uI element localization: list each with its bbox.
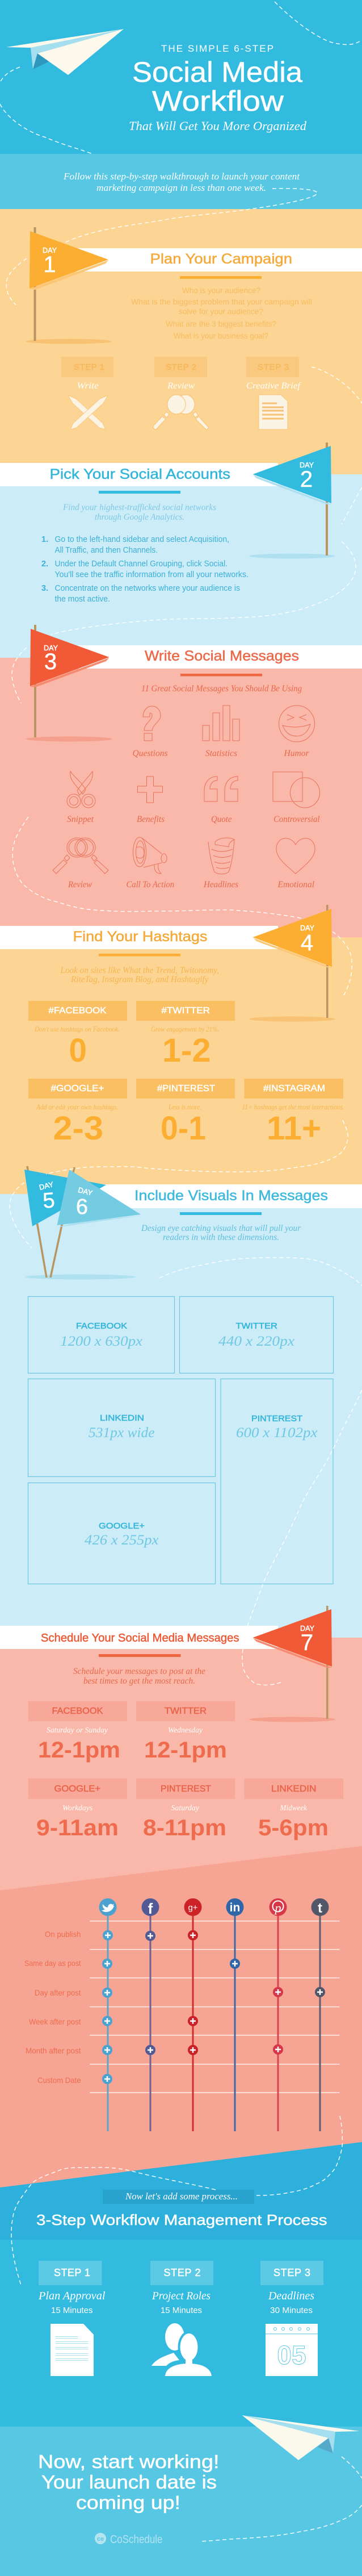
step 2 review: Review — [167, 381, 195, 391]
panel: workflow management process — [36, 2190, 327, 2376]
flags: day 5 and day 6 — [24, 1166, 141, 1279]
title: Workflow — [152, 85, 284, 117]
subtitle — [141, 1224, 301, 1242]
questions: What is the biggest problem that your campaign will — [131, 297, 312, 306]
flag: day 4: 4 — [301, 930, 313, 955]
card: google+ hashtags — [28, 1079, 127, 1147]
closing message: Now, start working! — [38, 2451, 219, 2472]
step 1 plan approval: 15 Minutes — [51, 2306, 93, 2315]
flag: day 7: DAY — [300, 1624, 314, 1633]
icon labels: Statistics — [205, 749, 237, 758]
column: tumblr — [311, 1898, 329, 2131]
flag: day 3: 3 — [44, 649, 57, 674]
callout: process — [103, 2190, 254, 2204]
card: facebook hashtags: 0 — [69, 1032, 87, 1069]
box: pinterest dimensions — [221, 1379, 333, 1584]
icon labels: Quote — [211, 815, 231, 824]
box: google+ dimensions — [28, 1483, 216, 1584]
card: twitter time: TWITTER — [165, 1706, 207, 1716]
column: google+ — [184, 1898, 202, 2131]
step 1 plan approval — [38, 2261, 106, 2376]
icon: call to action — [133, 837, 167, 874]
icon: paper plane — [6, 29, 124, 75]
divider — [99, 954, 180, 957]
box: linkedin dimensions: 531px wide — [89, 1425, 154, 1441]
column: twitter — [99, 1898, 117, 2131]
card: twitter hashtags: 1-2 — [162, 1032, 211, 1069]
column: google+: g+ — [188, 1903, 198, 1913]
icon: review — [53, 838, 108, 874]
banner — [0, 463, 278, 486]
card: google+ time: GOOGLE+ — [54, 1784, 100, 1794]
title — [129, 43, 307, 133]
flag: day 3 — [26, 625, 112, 742]
card: pinterest hashtags: 0-1 — [161, 1110, 206, 1147]
logo: coschedule — [95, 2533, 162, 2546]
panel: day 2 pick your social accounts — [0, 442, 335, 604]
column: facebook: f — [148, 1900, 153, 1917]
icon: snippet — [67, 771, 95, 808]
card: facebook time: 12-1pm — [38, 1738, 120, 1763]
step 3 creative brief — [246, 357, 302, 429]
icon labels: Humor — [284, 749, 309, 758]
card: pinterest time: 8-11pm — [143, 1815, 226, 1840]
panel: closing — [38, 2415, 360, 2546]
subtitle: through Google Analytics. — [95, 512, 184, 522]
card: twitter hashtags: #TWITTER — [161, 1006, 210, 1016]
questions: solve for your audience? — [179, 307, 263, 316]
icon: humor — [279, 705, 314, 742]
row labels: Month after post — [26, 2046, 81, 2055]
heading: Write Social Messages — [145, 648, 299, 664]
intro text: marketing campaign in less than one week. — [96, 182, 266, 193]
step 2 project roles: 15 Minutes — [161, 2306, 202, 2315]
numbered list: 3. — [41, 584, 48, 593]
card: google+ time: Workdays — [62, 1804, 93, 1813]
card: pinterest time: PINTEREST — [161, 1784, 211, 1794]
step 1 write — [61, 357, 113, 429]
flag: day 2: 2 — [300, 467, 313, 492]
card: google+ time: 9-11am — [36, 1815, 119, 1840]
icon labels: Snippet — [67, 815, 94, 824]
column: pinterest: p — [273, 1901, 281, 1915]
closing message — [38, 2451, 219, 2513]
card: facebook time: Saturday or Sunday — [47, 1726, 108, 1735]
step 1 write: STEP 1 — [74, 362, 104, 372]
flag: day 3: DAY — [44, 644, 58, 652]
flag: day 4: DAY — [300, 924, 314, 932]
step 2 project roles: STEP 2 — [163, 2267, 201, 2278]
questions: Who is your audience? — [182, 286, 260, 295]
box: linkedin dimensions: LINKEDIN — [100, 1413, 144, 1423]
box: twitter dimensions — [179, 1296, 334, 1373]
box: pinterest dimensions: 600 x 1102px — [236, 1425, 318, 1441]
step 3 deadlines — [260, 2261, 323, 2376]
title: Social Media — [132, 56, 302, 88]
card: pinterest time — [136, 1778, 235, 1840]
step 3 deadlines: Deadlines — [268, 2290, 314, 2302]
flags: day 5 and day 6: DAY — [77, 1185, 94, 1197]
icon labels: Headlines — [203, 880, 238, 890]
subtitle: Find your highest-trafficked social networks — [62, 503, 216, 512]
card: pinterest hashtags: #PINTEREST — [157, 1084, 215, 1093]
panel: day 4 find your hashtags — [0, 905, 344, 1147]
icon grid: message types — [53, 705, 320, 874]
callout: process: Now let's add some process... — [125, 2191, 238, 2202]
step 1 plan approval: STEP 1 — [54, 2267, 90, 2278]
divider — [99, 491, 180, 494]
card: instagram hashtags: 11+ hashtags get the most interactions. — [242, 1103, 344, 1111]
card: facebook hashtags: Don't use hashtags on Facebook. — [34, 1025, 120, 1033]
divider — [180, 276, 262, 279]
card: facebook hashtags: #FACEBOOK — [49, 1006, 107, 1016]
icon labels: Call To Action — [126, 880, 174, 890]
icon: controversial — [273, 772, 320, 808]
card: linkedin time: Midweek — [280, 1804, 308, 1813]
icon: paper plane — [242, 2415, 360, 2460]
numbered list: the most active. — [54, 595, 110, 604]
closing message: coming up! — [76, 2492, 180, 2513]
card: pinterest hashtags: Less is more. — [168, 1103, 201, 1111]
panel: day 7 schedule messages — [0, 1606, 343, 2131]
intro text: Follow this step-by-step walkthrough to launch your content — [63, 171, 300, 182]
icon labels: Questions — [133, 749, 168, 758]
banner — [57, 248, 362, 272]
column: pinterest — [269, 1898, 287, 2131]
subtitle: Design eye catching visuals that will pull your — [141, 1224, 301, 1233]
questions — [131, 286, 312, 340]
heading: Find Your Hashtags — [73, 929, 208, 945]
box: twitter dimensions: TWITTER — [236, 1321, 277, 1331]
numbered list: Concentrate on the networks where your audience is — [54, 584, 240, 593]
row labels: On publish — [45, 1930, 81, 1939]
flags: day 5 and day 6: 5 — [42, 1188, 56, 1213]
card: pinterest hashtags — [136, 1079, 235, 1147]
card: twitter time: 12-1pm — [144, 1738, 227, 1763]
divider — [99, 1654, 180, 1657]
box: linkedin dimensions — [28, 1379, 216, 1477]
flag: day 1 — [26, 227, 112, 344]
flag: day 1: 1 — [43, 252, 56, 277]
closing message: Your launch date is — [41, 2471, 217, 2493]
card: twitter hashtags — [136, 1001, 235, 1069]
numbered list: 1. — [41, 535, 48, 544]
icon labels: Benefits — [137, 815, 165, 824]
heading: 3-Step Workflow Management Process — [36, 2211, 327, 2228]
subtitle: Look on sites like What the Trend, Twitonomy, — [60, 966, 219, 975]
card: google+ time — [28, 1778, 127, 1840]
card: instagram hashtags: #INSTAGRAM — [263, 1084, 325, 1093]
numbered list: You'll see the traffic information from all your networks. — [54, 570, 249, 579]
row labels — [24, 1930, 81, 2085]
card: linkedin time: LINKEDIN — [271, 1784, 317, 1794]
heading: Plan Your Campaign — [150, 251, 292, 267]
banner — [0, 1626, 278, 1649]
icon: benefits — [137, 776, 162, 803]
numbered list — [41, 535, 249, 604]
heading: Schedule Your Social Media Messages — [41, 1632, 239, 1644]
divider — [180, 674, 262, 676]
intro text — [63, 171, 300, 193]
box: facebook dimensions — [28, 1296, 175, 1373]
panel: header — [6, 29, 307, 193]
box: google+ dimensions: GOOGLE+ — [99, 1521, 145, 1531]
chart: social posting schedule — [24, 1898, 339, 2131]
card: google+ hashtags: #GOOGLE+ — [51, 1084, 104, 1093]
icon: quote — [204, 776, 238, 801]
card: pinterest time: Saturday — [171, 1804, 200, 1813]
subtitle: Schedule your messages to post at the — [73, 1667, 205, 1676]
column: facebook — [142, 1898, 159, 2131]
numbered list: 2. — [41, 560, 48, 569]
icon: statistics — [203, 705, 239, 741]
flag: day 1: DAY — [43, 246, 57, 254]
box: google+ dimensions: 426 x 255px — [85, 1533, 159, 1548]
card: instagram hashtags — [242, 1079, 344, 1147]
step 2 project roles: Project Roles — [151, 2290, 211, 2302]
icon: questions — [143, 706, 161, 741]
title: THE SIMPLE 6-STEP — [161, 43, 275, 54]
subtitle — [62, 503, 216, 522]
numbered list: Under the Default Channel Grouping, click Social. — [54, 560, 228, 569]
card: google+ hashtags: Add or edit your own hashtags. — [36, 1103, 118, 1111]
flag: day 2: DAY — [300, 461, 314, 469]
flags: day 5 and day 6: DAY — [38, 1180, 54, 1192]
step 2 project roles — [150, 2261, 213, 2376]
card: facebook time: FACEBOOK — [52, 1706, 103, 1716]
subtitle: best times to get the most reach. — [83, 1676, 195, 1686]
divider — [180, 1212, 262, 1215]
banner — [57, 645, 362, 669]
box: twitter dimensions: 440 x 220px — [218, 1334, 294, 1349]
icon labels — [67, 749, 320, 890]
questions: What are the 3 biggest benefits? — [166, 319, 276, 328]
step 3 creative brief: STEP 3 — [258, 362, 289, 372]
row labels: Day after post — [35, 1988, 81, 1997]
row labels: Week after post — [29, 2017, 81, 2026]
step 2 review: STEP 2 — [166, 362, 196, 372]
subtitle: readers in with these dimensions. — [163, 1233, 279, 1242]
card: twitter hashtags: Grow engagement by 21%. — [151, 1025, 219, 1033]
flag: day 7 — [249, 1606, 335, 1722]
column: tumblr: t — [318, 1901, 322, 1916]
card: linkedin time — [244, 1778, 343, 1840]
panel: day 5 and 6 include visuals — [24, 1166, 362, 1584]
subtitle: RiteTag, Instgram Blog, and Hashtagify — [70, 975, 209, 984]
icon labels: Controversial — [273, 815, 320, 824]
card: twitter time — [136, 1701, 235, 1763]
icon labels: Review — [68, 880, 92, 890]
step 3 deadlines: STEP 3 — [273, 2267, 310, 2278]
step 3 deadlines: 05 — [277, 2340, 306, 2370]
box: pinterest dimensions: PINTEREST — [251, 1414, 302, 1423]
icon: headlines — [208, 838, 234, 874]
panel: day 3 write social messages — [26, 625, 362, 890]
heading: Include Visuals In Messages — [134, 1188, 328, 1204]
flag: day 7: 7 — [301, 1630, 313, 1655]
icon: emotional — [276, 838, 315, 874]
subtitle — [60, 966, 219, 984]
flag: day 2 — [249, 442, 335, 559]
numbered list: Go to the left-hand sidebar and select Acquisition, — [54, 535, 229, 544]
step 3 creative brief: Creative Brief — [246, 381, 302, 391]
step 1 write: Write — [77, 381, 99, 391]
step 1 plan approval: Plan Approval — [38, 2290, 106, 2302]
card: linkedin time: 5-6pm — [258, 1815, 329, 1840]
column: linkedin — [226, 1898, 244, 2131]
subtitle: 11 Great Social Messages You Should Be Using — [141, 684, 302, 694]
card: facebook hashtags — [28, 1001, 127, 1069]
step 3 deadlines: 30 Minutes — [270, 2306, 313, 2315]
questions: What is your business goal? — [174, 331, 268, 340]
logo: coschedule: ce — [97, 2536, 104, 2542]
row labels: Custom Date — [37, 2076, 81, 2085]
row labels: Same day as post — [24, 1959, 81, 1968]
panel: day 1 plan your campaign — [26, 227, 362, 430]
banner — [0, 926, 278, 949]
column: linkedin: in — [230, 1901, 240, 1914]
flags: day 5 and day 6: 6 — [76, 1195, 88, 1219]
heading: Pick Your Social Accounts — [50, 466, 230, 482]
title: That Will Get You More Organized — [129, 119, 307, 133]
logo: coschedule: CoSchedule — [110, 2533, 162, 2546]
box: facebook dimensions: FACEBOOK — [76, 1321, 127, 1331]
subtitle — [73, 1667, 205, 1686]
step 2 review — [153, 357, 209, 430]
icon labels: Emotional — [277, 880, 315, 890]
box: facebook dimensions: 1200 x 630px — [60, 1334, 142, 1349]
card: google+ hashtags: 2-3 — [53, 1110, 103, 1147]
card: twitter time: Wednesday — [168, 1726, 203, 1735]
flag: day 4 — [249, 905, 335, 1021]
banner — [57, 1184, 362, 1208]
card: instagram hashtags: 11+ — [267, 1110, 321, 1147]
numbered list: All Traffic, and then Channels. — [54, 546, 158, 555]
card: facebook time — [28, 1701, 127, 1763]
